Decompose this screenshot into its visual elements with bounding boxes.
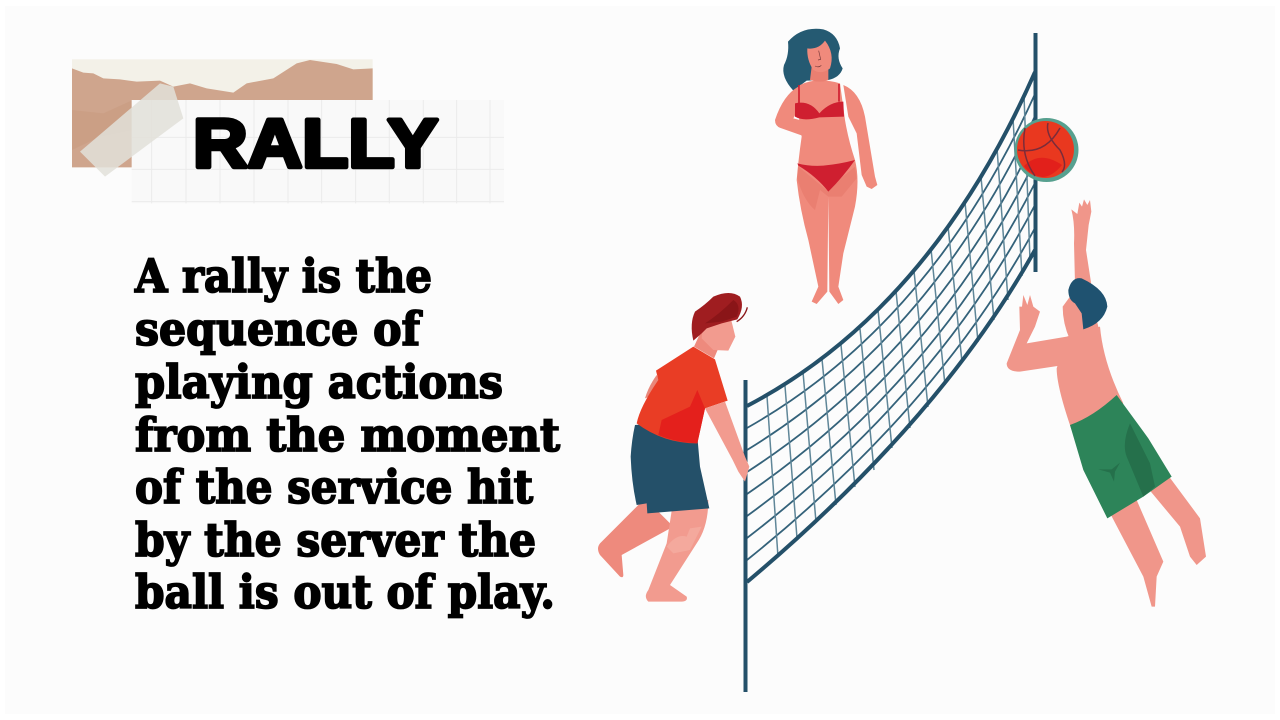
net top band [747, 72, 1035, 406]
darker fold on the brown paper [72, 100, 133, 150]
bikini bottom [797, 160, 855, 192]
forward arm and hand [1007, 295, 1075, 372]
body paragraph: definition of a rally: by the server the [135, 513, 536, 567]
bikini straps [799, 84, 839, 103]
ball body [1017, 121, 1074, 178]
front leg [646, 500, 708, 602]
back arm sliver [645, 375, 660, 398]
right leg [1147, 473, 1206, 565]
ball shade [1024, 158, 1062, 177]
body paragraph: definition of a rally: sequence of [135, 302, 423, 356]
shorts crease [1098, 463, 1120, 482]
torso [1057, 327, 1123, 430]
hair highlight [705, 300, 739, 323]
back leg [598, 503, 673, 577]
shirt [637, 347, 728, 443]
net bottom band [747, 250, 1035, 582]
cream torn paper backing [72, 59, 373, 103]
near arm [775, 87, 825, 145]
grid paper [132, 100, 504, 203]
arm [705, 402, 749, 482]
grid paper lines [132, 100, 504, 203]
left pole [744, 380, 748, 692]
neck [810, 67, 828, 82]
neck [694, 330, 718, 358]
net mesh columns [767, 95, 1030, 557]
shirt shade [658, 390, 705, 443]
ball seams [1018, 123, 1065, 176]
net mesh rows [747, 94, 1035, 560]
player: man in red shirt [598, 293, 749, 602]
body paragraph: definition of a rally: from the moment [135, 408, 561, 462]
hair [1068, 278, 1107, 329]
body [797, 80, 857, 304]
hair lock [737, 307, 747, 322]
body paragraph: definition of a rally: ball is out of play. [135, 565, 555, 619]
player: man jumping in green shorts [1007, 199, 1206, 607]
bikini top [795, 102, 844, 119]
masking tape [80, 83, 183, 177]
face [807, 41, 832, 72]
shorts shade [1125, 423, 1155, 497]
heading: RALLY [193, 105, 438, 182]
raised arm [1071, 199, 1092, 287]
neck and face [1063, 297, 1100, 340]
brown torn paper [72, 60, 373, 167]
player: woman in red bikini [775, 29, 877, 304]
left leg [1108, 500, 1163, 607]
body paragraph: definition of a rally: A rally is the [134, 249, 432, 303]
face [702, 315, 735, 351]
shorts [631, 423, 709, 513]
body paragraph: definition of a rally [134, 249, 561, 619]
body paragraph: definition of a rally: playing actions [135, 355, 503, 409]
shorts [1070, 395, 1172, 518]
hair [783, 29, 843, 91]
title banner: torn paper, tape, grid paper and heading [72, 59, 504, 203]
far arm [843, 85, 877, 189]
volleyball net [746, 33, 1036, 692]
knee shading [667, 527, 702, 553]
hip shading [797, 167, 857, 210]
right pole [1034, 33, 1038, 272]
face features [815, 51, 821, 67]
ball rim [1014, 118, 1078, 182]
hair [692, 293, 742, 341]
ball [1014, 118, 1078, 182]
body paragraph: definition of a rally: of the service hit [135, 460, 534, 514]
